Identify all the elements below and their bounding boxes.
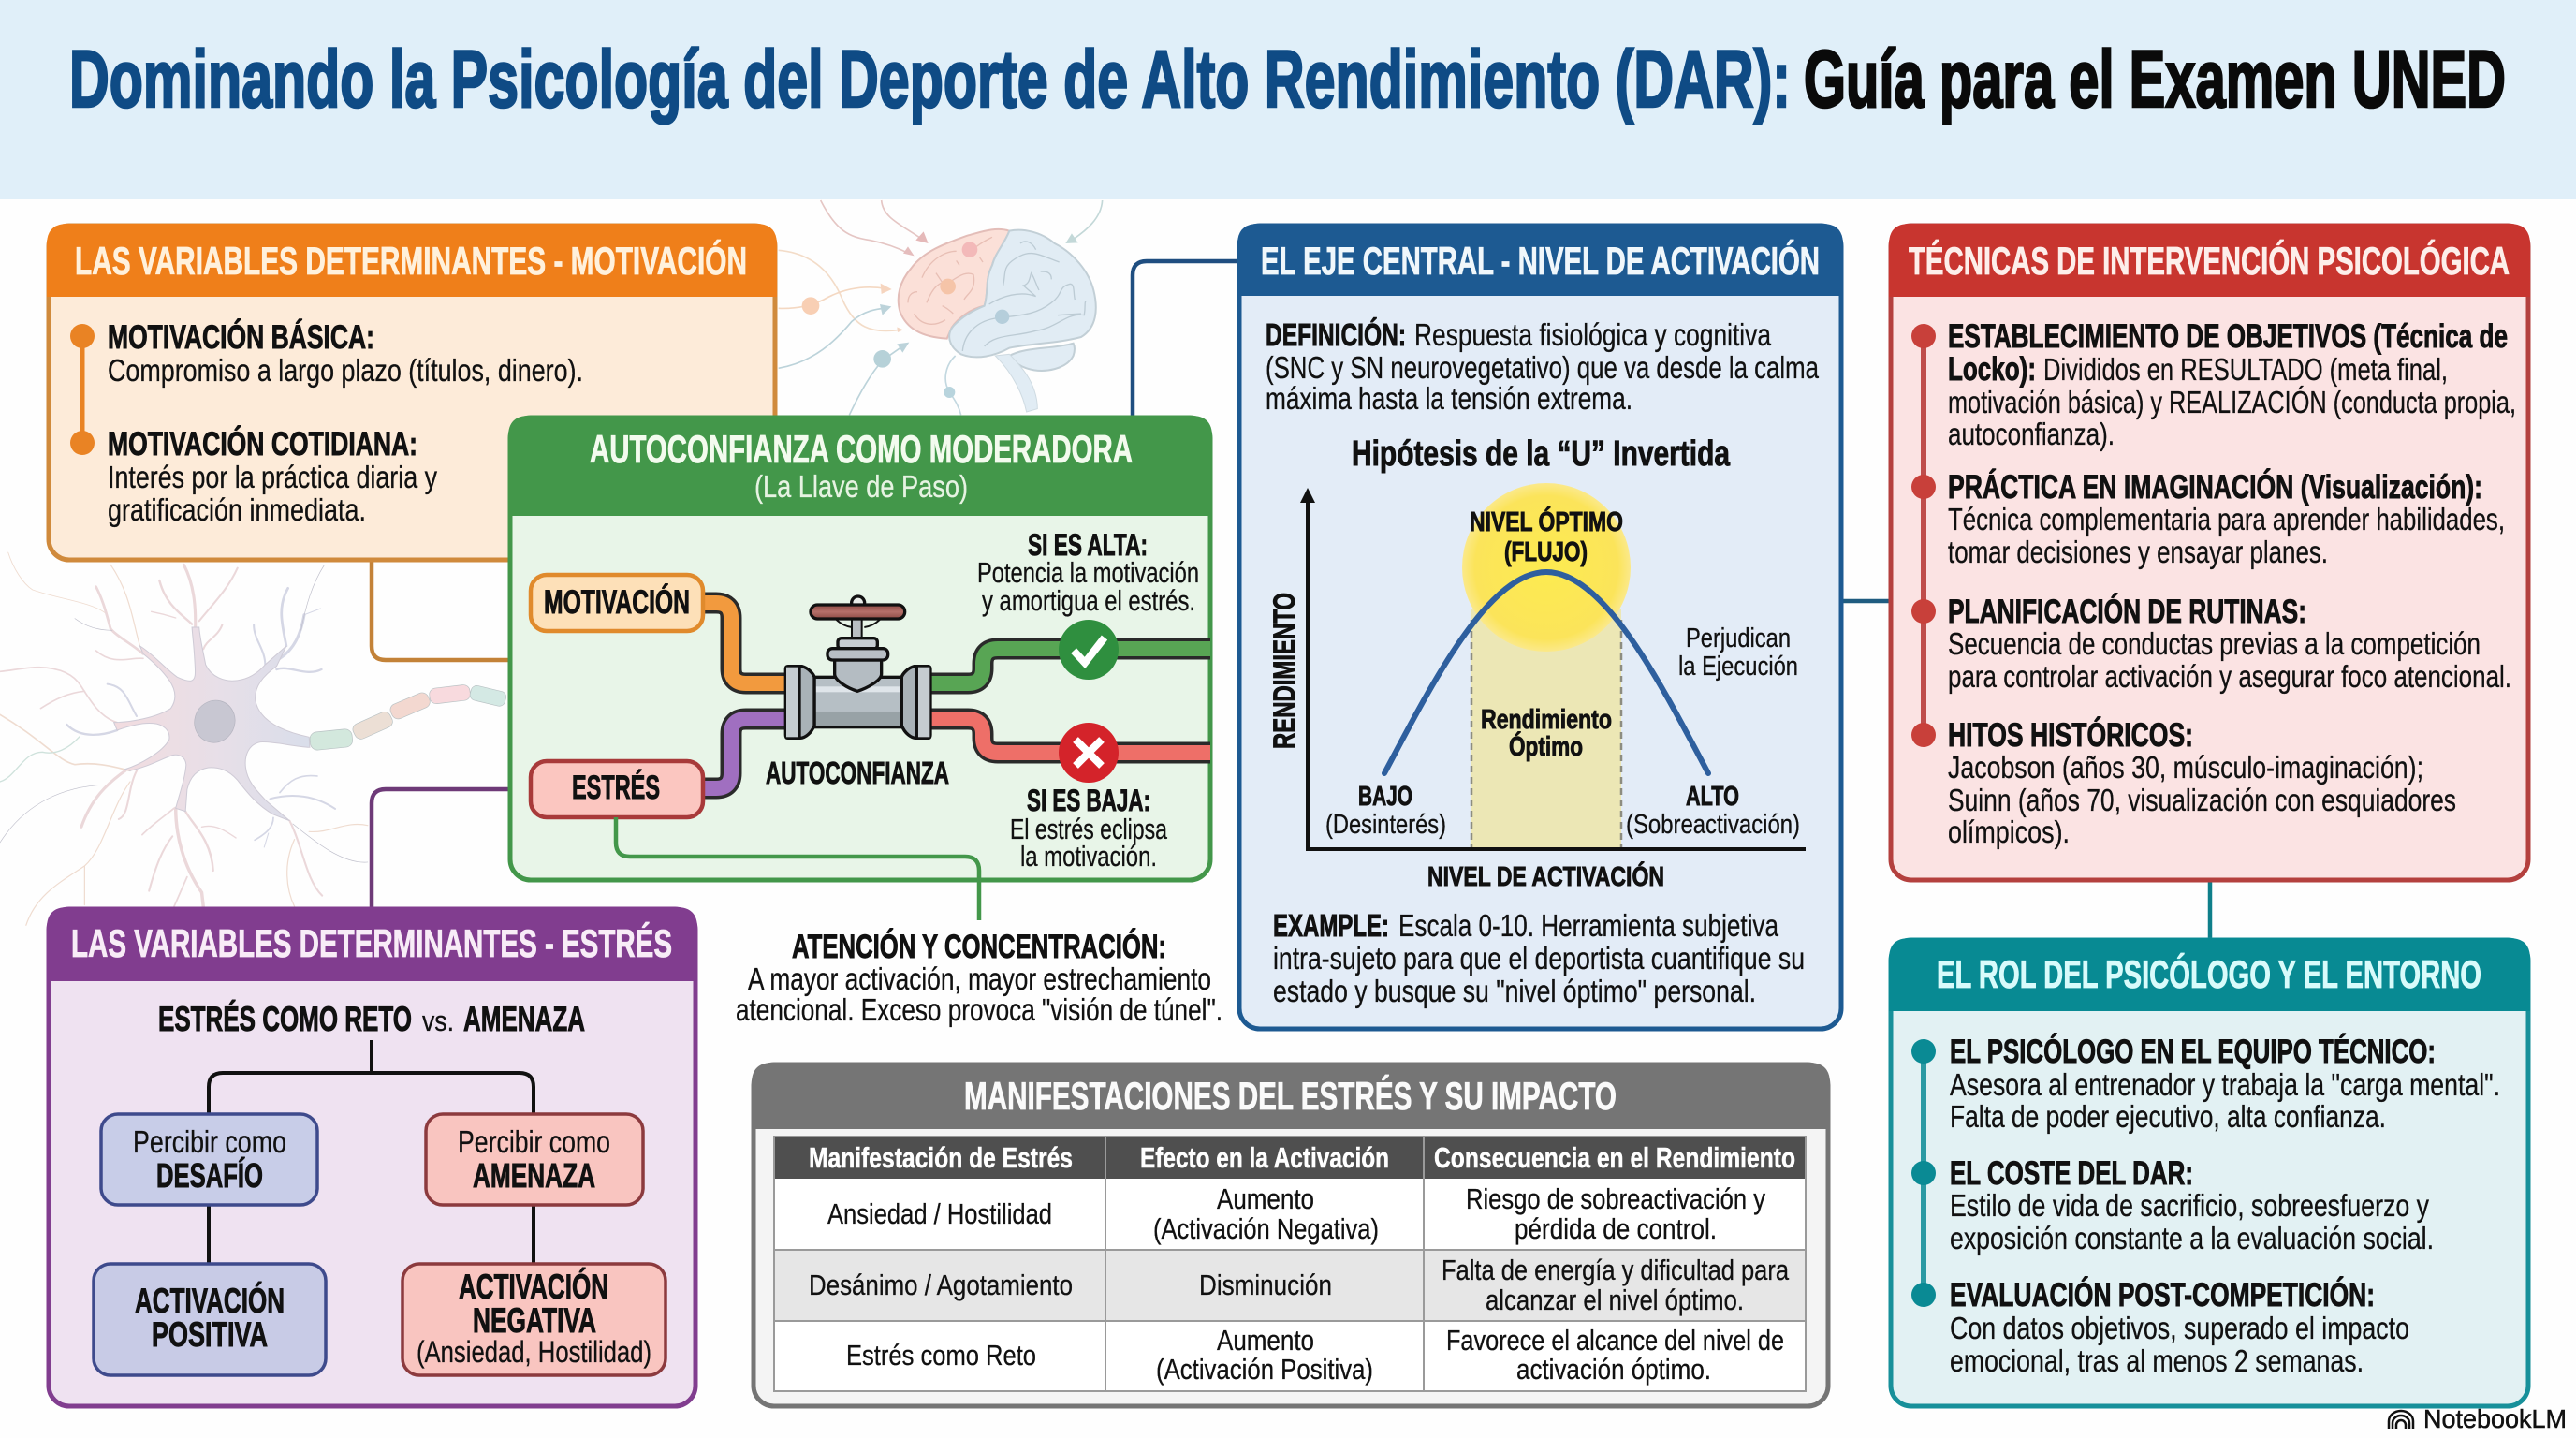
illustration: brain with signal lines	[779, 200, 1103, 415]
label: bajo	[1325, 782, 1446, 840]
heading: autoconfianza: (La Llave de Paso)	[754, 469, 968, 504]
table row: desánimo: alcanzar el nivel óptimo.	[1486, 1284, 1744, 1316]
item: evaluación: EVALUACIÓN POST-COMPETICIÓN:	[1950, 1276, 2375, 1313]
panel: manifestaciones	[752, 1063, 1830, 1406]
text block: definición	[1266, 317, 1820, 416]
node: estrés	[531, 761, 703, 817]
chart: U invertida	[1267, 434, 1806, 892]
timeline: motivación	[70, 324, 95, 455]
heading: nivel de activación: EL EJE CENTRAL - NIVEL DE ACTIVACIÓN	[1261, 238, 1820, 283]
axes	[1300, 488, 1806, 849]
curve	[1384, 572, 1708, 773]
item: rutinas	[1948, 593, 2511, 694]
note: si es alta: SI ES ALTA:	[1028, 528, 1148, 562]
label: bajo: BAJO	[1358, 782, 1412, 812]
item: motivación cotidiana: gratificación inmediata.	[108, 492, 366, 527]
node: motivación	[531, 575, 703, 631]
table	[774, 1137, 1806, 1391]
item: hitos: HITOS HISTÓRICOS:	[1948, 716, 2193, 754]
tree connectors	[209, 1040, 534, 1264]
panel: motivación	[47, 224, 777, 560]
text block: example: estado y busque su "nivel óptimo" personal.	[1273, 974, 1756, 1008]
text block: example: EXAMPLE:	[1273, 908, 1389, 943]
label: alto: (Sobreactivación)	[1626, 810, 1800, 840]
item: imaginación	[1948, 468, 2505, 569]
connector: estrés to atención	[616, 817, 979, 920]
label: perjudican: Perjudican	[1686, 624, 1791, 653]
text block: atención y concentración: ATENCIÓN Y CONCENTRACIÓN:	[792, 928, 1166, 965]
note: si es baja	[1010, 784, 1168, 873]
item: hitos	[1948, 716, 2456, 849]
label: alto	[1626, 782, 1800, 840]
table row: ansiedad: pérdida de control.	[1515, 1212, 1717, 1245]
table header	[809, 1141, 1795, 1174]
item: evaluación: emocional, tras al menos 2 semanas.	[1950, 1343, 2364, 1378]
item: coste: EL COSTE DEL DAR:	[1950, 1155, 2193, 1192]
label: nivel óptimo: NIVEL ÓPTIMO	[1470, 506, 1623, 537]
heading: estrés: LAS VARIABLES DETERMINANTES - ESTRÉS	[71, 921, 672, 965]
text block: atención y concentración: atencional. Exceso provoca "visión de túnel".	[736, 992, 1222, 1027]
label: rendimiento óptimo: Óptimo	[1509, 730, 1583, 762]
note: si es baja: SI ES BAJA:	[1027, 784, 1150, 817]
box: activación negativa	[402, 1264, 666, 1375]
label: perjudican: la Ejecución	[1678, 652, 1798, 682]
item: objetivos: autoconfianza).	[1948, 417, 2115, 451]
table row: reto: activación óptimo.	[1516, 1353, 1711, 1386]
table row: reto: Aumento	[1217, 1324, 1314, 1357]
table row: ansiedad	[827, 1182, 1765, 1245]
text block: definición: máxima hasta la tensión extrema.	[1266, 381, 1632, 416]
item: objetivos	[1948, 318, 2516, 451]
item: imaginación: tomar decisiones y ensayar planes.	[1948, 535, 2328, 569]
item: hitos: Jacobson (años 30, músculo-imaginación);	[1948, 750, 2423, 785]
icon: cross	[1059, 723, 1119, 783]
connector lines between panels	[372, 261, 2210, 938]
node: estrés: ESTRÉS	[572, 769, 660, 806]
table row: reto: Estrés como Reto	[846, 1339, 1036, 1372]
subtitle: reto vs amenaza: vs.	[422, 1005, 454, 1037]
table row: ansiedad: Aumento	[1217, 1182, 1314, 1215]
icon: check	[1059, 620, 1119, 680]
panel: autoconfianza	[508, 416, 1212, 880]
item: motivación básica	[108, 318, 583, 388]
highlight: zona óptima	[1462, 483, 1631, 849]
heading: autoconfianza: AUTOCONFIANZA COMO MODERADORA	[590, 427, 1133, 471]
heading: manifestaciones: MANIFESTACIONES DEL ESTRÉS Y SU IMPACTO	[964, 1074, 1617, 1118]
subtitle: reto vs amenaza: AMENAZA	[463, 1000, 585, 1038]
text block: atención y concentración	[736, 928, 1222, 1027]
panel: estrés	[47, 907, 697, 1406]
item: hitos: olímpicos).	[1948, 814, 2070, 849]
item: coste: exposición constante a la evaluación social.	[1950, 1221, 2434, 1255]
item: evaluación	[1950, 1276, 2409, 1378]
icon: valve	[785, 596, 930, 738]
item: motivación básica: MOTIVACIÓN BÁSICA:	[108, 318, 374, 356]
table row: reto	[846, 1324, 1784, 1386]
table header: Manifestación de Estrés	[809, 1141, 1073, 1174]
item: evaluación: Con datos objetivos, superado el impacto	[1950, 1311, 2409, 1345]
box: activación negativa: (Ansiedad, Hostilidad)	[417, 1335, 651, 1369]
text block: example	[1273, 908, 1805, 1008]
table row: ansiedad: (Activación Negativa)	[1153, 1212, 1379, 1245]
item: motivación cotidiana	[108, 425, 437, 527]
text block: definición: DEFINICIÓN:	[1266, 317, 1406, 352]
box: activación positiva: POSITIVA	[152, 1315, 268, 1354]
header band	[0, 0, 2576, 199]
y axis label: RENDIMIENTO	[1267, 593, 1301, 749]
table row: desánimo: Disminución	[1199, 1269, 1332, 1301]
item: objetivos: Divididos en RESULTADO (meta final,	[2043, 352, 2448, 387]
text block: example: intra-sujeto para que el deportista cuantifique su	[1273, 941, 1805, 976]
item: motivación cotidiana: MOTIVACIÓN COTIDIANA:	[108, 425, 417, 462]
panel: nivel de activación	[1237, 224, 1843, 1029]
note: si es alta: y amortigua el estrés.	[982, 584, 1195, 617]
timeline: técnicas	[1911, 324, 1936, 747]
pipes	[697, 603, 1210, 788]
label: autoconfianza: AUTOCONFIANZA	[766, 756, 949, 790]
logo: NotebookLM: NotebookLM	[2423, 1404, 2567, 1433]
table row: reto: (Activación Positiva)	[1156, 1353, 1373, 1386]
label: nivel óptimo	[1470, 506, 1623, 567]
box: amenaza: Percibir como	[458, 1124, 610, 1159]
item: coste	[1950, 1155, 2434, 1255]
label: bajo: (Desinterés)	[1325, 810, 1446, 840]
item: rutinas: PLANIFICACIÓN DE RUTINAS:	[1948, 593, 2306, 630]
box: activación negativa: NEGATIVA	[473, 1301, 596, 1340]
item: motivación básica: Compromiso a largo plazo (títulos, dinero).	[108, 353, 583, 388]
note: si es alta	[977, 528, 1199, 617]
label: nivel óptimo: (FLUJO)	[1504, 537, 1588, 567]
box: desafío	[101, 1114, 317, 1205]
panel: rol del psicólogo	[1889, 938, 2530, 1406]
item: equipo técnico: Falta de poder ejecutivo, alta confianza.	[1950, 1099, 2386, 1134]
text block: example: Escala 0-10. Herramienta subjetiva	[1398, 908, 1778, 943]
box: activación negativa: ACTIVACIÓN	[459, 1267, 608, 1306]
text block: definición: (SNC y SN neurovegetativo) que va desde la calma	[1266, 350, 1820, 385]
box: desafío: Percibir como	[133, 1124, 286, 1159]
box: activación positiva: ACTIVACIÓN	[135, 1281, 285, 1320]
heading: autoconfianza	[590, 427, 1133, 504]
table row: ansiedad: Riesgo de sobreactivación y	[1466, 1182, 1765, 1215]
chart title: Hipótesis de la “U” Invertida	[1352, 434, 1731, 474]
label: perjudican	[1678, 624, 1798, 682]
table row: desánimo	[809, 1254, 1790, 1316]
subtitle: reto vs amenaza: ESTRÉS COMO RETO	[158, 1000, 412, 1038]
note: si es baja: la motivación.	[1020, 840, 1157, 873]
node: motivación: MOTIVACIÓN	[544, 583, 690, 621]
item: motivación cotidiana: Interés por la práctica diaria y	[108, 460, 437, 494]
title: Dominando la Psicología del Deporte de Alto Rendimiento (DAR):	[69, 35, 1791, 125]
item: objetivos: Locko):	[1948, 351, 2036, 388]
box: activación positiva	[94, 1264, 326, 1375]
illustration: neuron	[0, 552, 507, 925]
table header: Consecuencia en el Rendimiento	[1434, 1141, 1795, 1174]
label: rendimiento óptimo: Rendimiento	[1481, 705, 1612, 735]
table row: ansiedad: Ansiedad / Hostilidad	[827, 1197, 1052, 1230]
note: si es baja: El estrés eclipsa	[1010, 813, 1168, 845]
table row: desánimo: Falta de energía y dificultad para	[1442, 1254, 1790, 1286]
table row: reto: Favorece el alcance del nivel de	[1446, 1324, 1784, 1357]
label: rendimiento óptimo	[1481, 705, 1612, 762]
table header: Efecto en la Activación	[1140, 1141, 1389, 1174]
timeline: rol	[1911, 1039, 1936, 1307]
item: equipo técnico	[1950, 1033, 2500, 1134]
heading: motivación: LAS VARIABLES DETERMINANTES - MOTIVACIÓN	[75, 238, 747, 283]
label: alto: ALTO	[1686, 782, 1739, 812]
text block: atención y concentración: A mayor activación, mayor estrechamiento	[748, 961, 1211, 996]
item: coste: Estilo de vida de sacrificio, sobreesfuerzo y	[1950, 1188, 2429, 1223]
box: amenaza: AMENAZA	[473, 1156, 595, 1195]
x axis label: NIVEL DE ACTIVACIÓN	[1427, 860, 1664, 892]
box: amenaza	[426, 1114, 643, 1205]
note: si es alta: Potencia la motivación	[977, 556, 1199, 589]
panel: técnicas de intervención	[1889, 224, 2530, 880]
table row: desánimo: Desánimo / Agotamiento	[809, 1269, 1073, 1301]
text block: definición: Respuesta fisiológica y cognitiva	[1414, 317, 1772, 352]
item: hitos: Suinn (años 70, visualización con esquiadores	[1948, 783, 2456, 817]
box: desafío: DESAFÍO	[156, 1156, 263, 1195]
